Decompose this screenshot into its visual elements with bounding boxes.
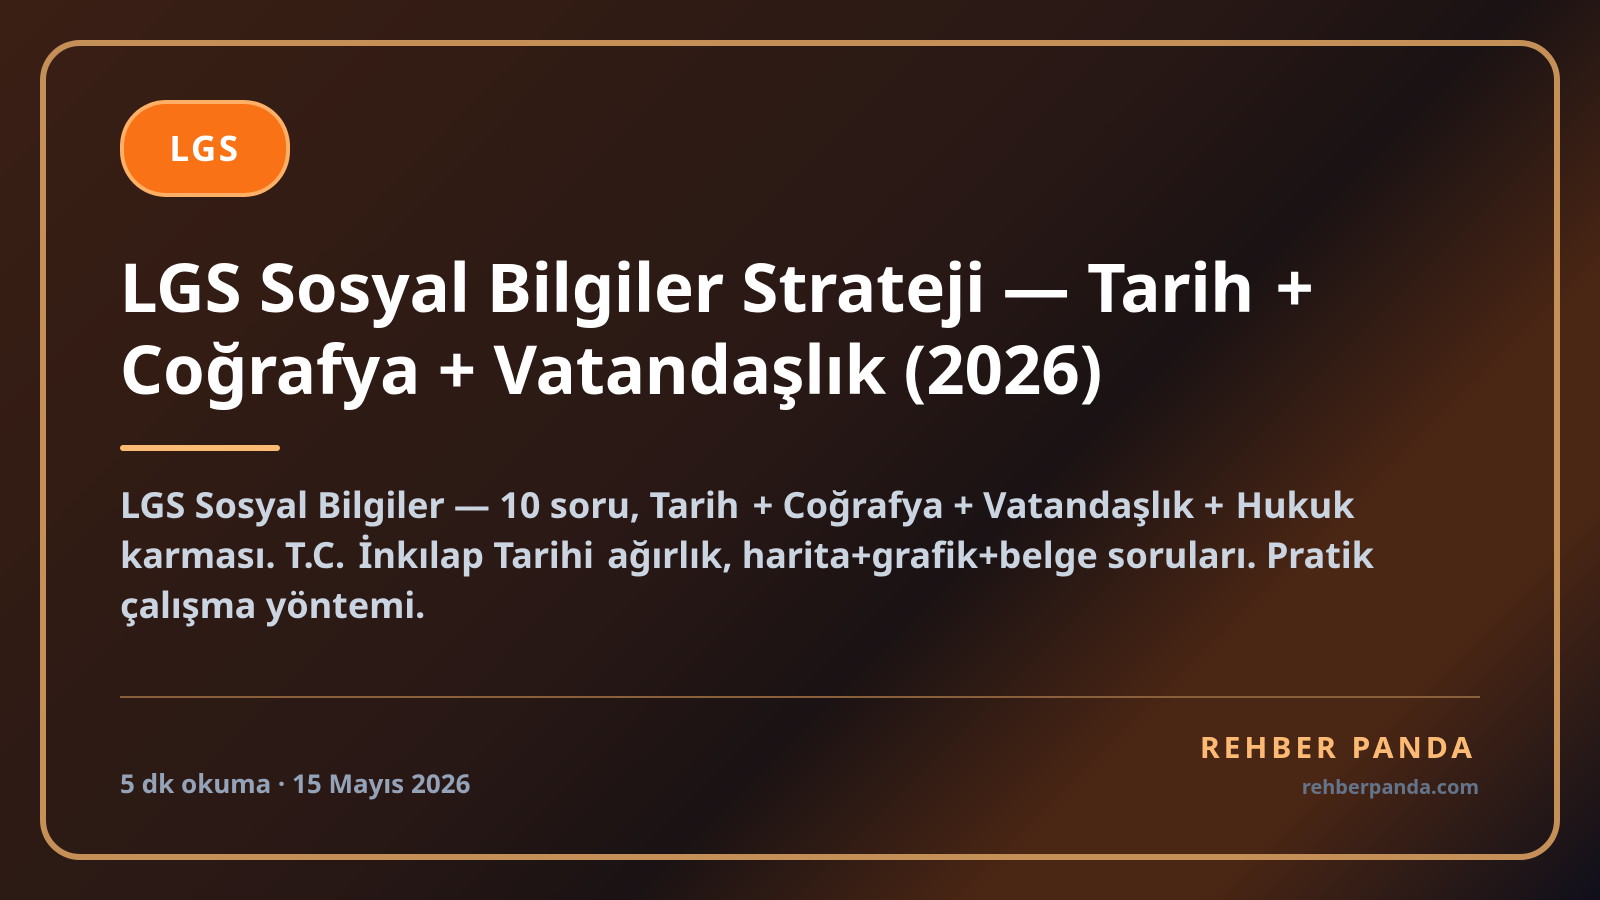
description: karması. T.C. İnkılap Tarihi ağırlık, harita+grafik+belge soruları. Pratik xyxy=(120,530,1374,579)
accent bar xyxy=(120,445,280,451)
brand url: rehberpanda.com xyxy=(1302,773,1479,800)
badge: LGS xyxy=(120,100,290,197)
description: LGS Sosyal Bilgiler — 10 soru, Tarih + Coğrafya + Vatandaşlık + Hukuk xyxy=(120,480,1355,529)
divider xyxy=(120,696,1480,698)
meta: reading time and date: 5 dk okuma · 15 Mayıs 2026 xyxy=(120,765,470,801)
badge: LGS: LGS xyxy=(170,125,240,172)
description: çalışma yöntemi. xyxy=(120,580,425,629)
brand name: REHBER PANDA xyxy=(1200,726,1476,767)
title: LGS Sosyal Bilgiler Strateji — Tarih + xyxy=(120,240,1314,332)
title xyxy=(120,240,1314,414)
description xyxy=(120,480,1374,629)
title: Coğrafya + Vatandaşlık (2026) xyxy=(120,322,1102,414)
